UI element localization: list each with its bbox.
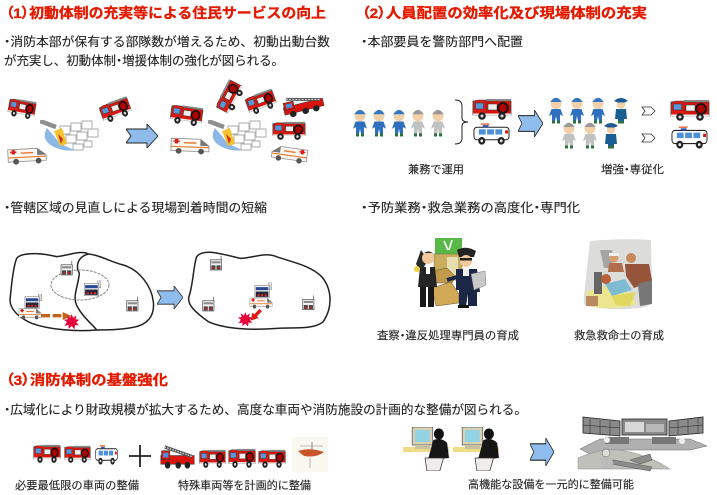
- icon: blue staff: [353, 110, 406, 136]
- title: section 3: （3）消防体制の基盤強化: [6, 372, 168, 388]
- diagram: personnel before: [353, 99, 511, 145]
- label: paramedics: 救急救命士の育成: [574, 328, 664, 342]
- icon: exit sign: [435, 238, 462, 254]
- label: special vehicles: 特殊車両等を計画的に整備: [178, 478, 311, 492]
- vehicles: minimum set: [34, 445, 117, 465]
- arrow: section 3: [530, 438, 554, 466]
- icon: officer right: [447, 248, 486, 308]
- arrow: section 2: [518, 110, 543, 137]
- arrow: map: [157, 286, 183, 309]
- label: minimum vehicles: 必要最低限の車両の整備: [15, 478, 139, 492]
- illustration: paramedic rescue: [584, 239, 652, 309]
- text block: staff assignment: ・本部要員を警防部門へ配置: [361, 34, 523, 49]
- title: section 1: （1）初動体制の充実等による住民サービスの向上: [6, 5, 326, 21]
- arrow: section 1: [126, 124, 158, 148]
- illustration: individual workstations: [403, 427, 499, 471]
- diagram: personnel after: [549, 98, 709, 149]
- illustration: inspectors: [414, 238, 486, 308]
- illustration: control room: [578, 417, 707, 471]
- label: dedicated duty: 増強・専従化: [601, 163, 664, 176]
- icon: brace: [455, 100, 468, 144]
- diagram: vehicles before: [7, 96, 133, 165]
- text block: first-response description: ・消防本部が保有する部隊数が増えるため、初動出動台数: [4, 34, 331, 49]
- text block: funding description: ・広域化により財政規模が拡大するため、高度な車両や消防施設の計画的な整備が図られる。: [4, 402, 527, 417]
- text block: advanced services: ・予防業務 ・救急業務の高度化 ・専門化: [361, 200, 580, 215]
- label: integrated equipment: 高機能な設備を一元的に整備可能: [468, 477, 634, 491]
- icon: plus: [129, 445, 151, 467]
- icon: boxes: [432, 268, 459, 306]
- text block: first-response description: が充実し、初動体制・増援体制の強化が図られる。: [4, 53, 284, 68]
- text block: jurisdiction review: ・管轄区域の見直しによる現場到着時間の短縮: [4, 200, 267, 215]
- label: inspection staff: 査察・違反処理専門員の育成: [377, 328, 519, 342]
- icon: grey staff: [411, 110, 445, 136]
- icon: helicopter: [292, 437, 328, 472]
- diagram: vehicles after: [170, 79, 325, 165]
- text block: first-response description: [4, 34, 331, 68]
- vehicles: special set: [161, 437, 328, 472]
- map: before: [10, 252, 154, 331]
- icon: rescuer right: [625, 253, 652, 306]
- icon: rescuer top: [608, 253, 624, 272]
- label: concurrent duty: 兼務で運用: [408, 162, 464, 176]
- icon: patient: [601, 274, 636, 306]
- title: section 2: （2）人員配置の効率化及び現場体制の充実: [362, 5, 647, 21]
- map: after: [189, 252, 330, 329]
- icon: inspector left: [414, 250, 437, 307]
